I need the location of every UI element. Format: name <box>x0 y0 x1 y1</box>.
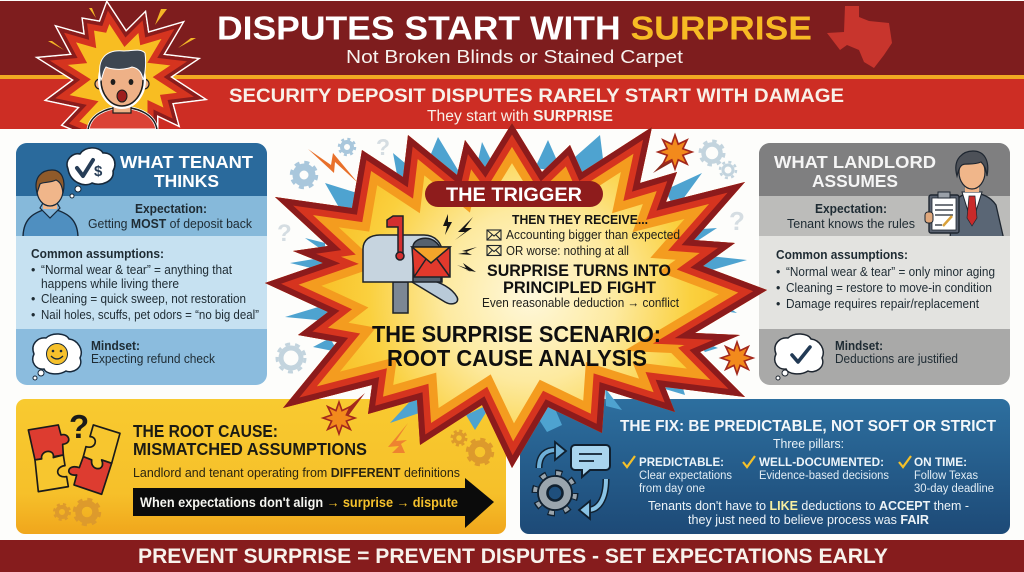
panel: what landlord assumes: • <box>776 265 780 279</box>
common assumptions: Common assumptions: <box>31 246 164 261</box>
pillar: on time: ON TIME: <box>914 455 967 469</box>
panel: what landlord assumes: Damage requires repair/replacement <box>786 297 979 311</box>
icon: Texas silhouette <box>827 6 892 68</box>
icon: tenant person <box>23 170 78 238</box>
footer banner <box>0 540 1024 572</box>
panel: what tenant thinks: Getting MOST of deposit back <box>88 216 252 231</box>
decorative gears and question marks <box>277 134 745 372</box>
panel: the fix: they just need to believe process was FAIR <box>688 512 930 527</box>
pillar: predictable: PREDICTABLE: <box>639 455 724 469</box>
gears <box>54 431 492 524</box>
question mark: ? <box>69 408 89 445</box>
panel: what landlord assumes: ASSUMES <box>812 171 898 191</box>
subheading line 2: They start with SURPRISE <box>427 108 613 125</box>
title: DISPUTES START WITH SURPRISE <box>217 10 812 46</box>
panel: what tenant thinks: “Normal wear & tear” = anything that <box>41 263 232 277</box>
header band: title <box>0 1 1024 129</box>
panel: what landlord assumes: Cleaning = restore to move-in condition <box>786 281 992 295</box>
panel: what landlord assumes: • <box>776 297 780 311</box>
blue spikes behind burst <box>285 135 747 432</box>
pillar: well-documented: WELL-DOCUMENTED: <box>759 455 884 469</box>
common assumptions: Common assumptions: <box>776 247 908 262</box>
panel: the fix <box>520 399 1010 534</box>
mindset: Mindset: <box>835 338 883 353</box>
panel: what tenant thinks: Cleaning = quick sweep, not restoration <box>41 292 246 306</box>
body text: Landlord and tenant operating from DIFFERENT definitions <box>133 465 460 480</box>
panel: the root cause <box>16 399 506 534</box>
expectation: Expectation: <box>815 201 887 216</box>
icon: mailbox with envelope <box>363 216 458 313</box>
subtitle: Not Broken Blinds or Stained Carpet <box>346 46 683 67</box>
central starburst: the trigger: OR worse: nothing at all <box>506 244 629 258</box>
arrow: When expectations don't align → surprise → dispute <box>140 495 458 510</box>
central starburst: the trigger: Accounting bigger than expected <box>506 228 680 242</box>
icon: envelopes <box>487 230 501 256</box>
central starburst: the trigger: THE TRIGGER <box>446 185 582 206</box>
central starburst: the trigger <box>265 123 767 468</box>
icon: shocked person in burst <box>39 3 204 135</box>
icon: thought cloud with check and dollar <box>67 148 115 198</box>
closing message: Tenants don't have to LIKE deductions to ACCEPT them - <box>648 498 969 513</box>
panel: what tenant thinks: • <box>31 308 35 322</box>
subheader band <box>0 79 1024 129</box>
surprise text: SURPRISE TURNS INTO <box>487 262 671 280</box>
pillar: on time: 30-day deadline <box>914 483 994 495</box>
decorative gears and question marks: ? <box>376 134 390 160</box>
subheading: SECURITY DEPOSIT DISPUTES RARELY START WITH DAMAGE <box>229 85 844 107</box>
icon: lightning marks <box>443 214 477 272</box>
icon: smiley cloud <box>33 334 81 380</box>
heading: WHAT LANDLORD <box>774 152 936 172</box>
pillar: on time <box>899 455 994 495</box>
three pillars: Three pillars: <box>773 437 844 451</box>
panel: what landlord assumes <box>759 143 1010 385</box>
panel: what tenant thinks: • <box>31 263 35 277</box>
trigger text: THEN THEY RECEIVE... <box>512 212 648 227</box>
footer banner: PREVENT SURPRISE = PREVENT DISPUTES - SET EXPECTATIONS EARLY <box>138 544 888 568</box>
expectation: Expectation: <box>135 201 207 216</box>
icon: landlord person with clipboard <box>925 151 1004 240</box>
panel: what tenant thinks: • <box>31 292 35 306</box>
panel: what tenant thinks <box>16 143 267 385</box>
decorative gears and question marks: ? <box>277 220 292 247</box>
panel: what tenant thinks: THINKS <box>154 171 219 191</box>
central starburst: the trigger: Even reasonable deduction → conflict <box>482 295 679 310</box>
pillar: predictable: Clear expectations <box>639 470 732 482</box>
icon: puzzle pieces <box>28 425 120 494</box>
icon: lightning on yellow panel <box>388 423 408 453</box>
pill: the trigger <box>425 181 603 207</box>
central starburst: the trigger: ROOT CAUSE ANALYSIS <box>387 345 647 371</box>
icon: small burst top right <box>653 135 692 173</box>
panel: the root cause: MISMATCHED ASSUMPTIONS <box>133 439 367 459</box>
icon: process gear, speech bubble, arrows <box>535 442 610 519</box>
arrow <box>133 478 494 528</box>
pillar: well-documented: Evidence-based decisions <box>759 470 889 482</box>
central starburst: the trigger: PRINCIPLED FIGHT <box>503 279 656 297</box>
decorative gears and question marks: ? <box>729 206 745 236</box>
icon: thought cloud with check and dollar: $ <box>94 163 103 180</box>
mindset: Mindset: <box>91 338 140 353</box>
panel: what landlord assumes: • <box>776 281 780 295</box>
icon: check cloud <box>775 334 823 380</box>
panel: what tenant thinks: happens while living there <box>41 277 179 291</box>
pillar: predictable: from day one <box>639 483 705 495</box>
pillar: well-documented <box>743 455 889 482</box>
panel: what landlord assumes: “Normal wear & tear” = only minor aging <box>786 265 995 279</box>
panel: what landlord assumes: Tenant knows the rules <box>787 216 915 231</box>
panel: what tenant thinks: Nail holes, scuffs, pet odors = “no big deal” <box>41 308 259 322</box>
panel: what landlord assumes: Deductions are justified <box>835 352 958 366</box>
burst layers <box>265 123 767 468</box>
heading: THE FIX: BE PREDICTABLE, NOT SOFT OR STRICT <box>620 418 996 435</box>
icon: small burst on yellow panel <box>323 393 365 434</box>
icon: lightning bolt top left <box>308 149 358 183</box>
heading: THE ROOT CAUSE: <box>133 421 278 441</box>
heading: WHAT TENANT <box>120 152 253 172</box>
pillar: predictable <box>623 455 732 495</box>
icon: small burst right <box>721 342 753 374</box>
pillar: on time: Follow Texas <box>914 470 978 482</box>
panel: what tenant thinks: Expecting refund check <box>91 352 216 366</box>
scenario heading: THE SURPRISE SCENARIO: <box>372 321 661 347</box>
